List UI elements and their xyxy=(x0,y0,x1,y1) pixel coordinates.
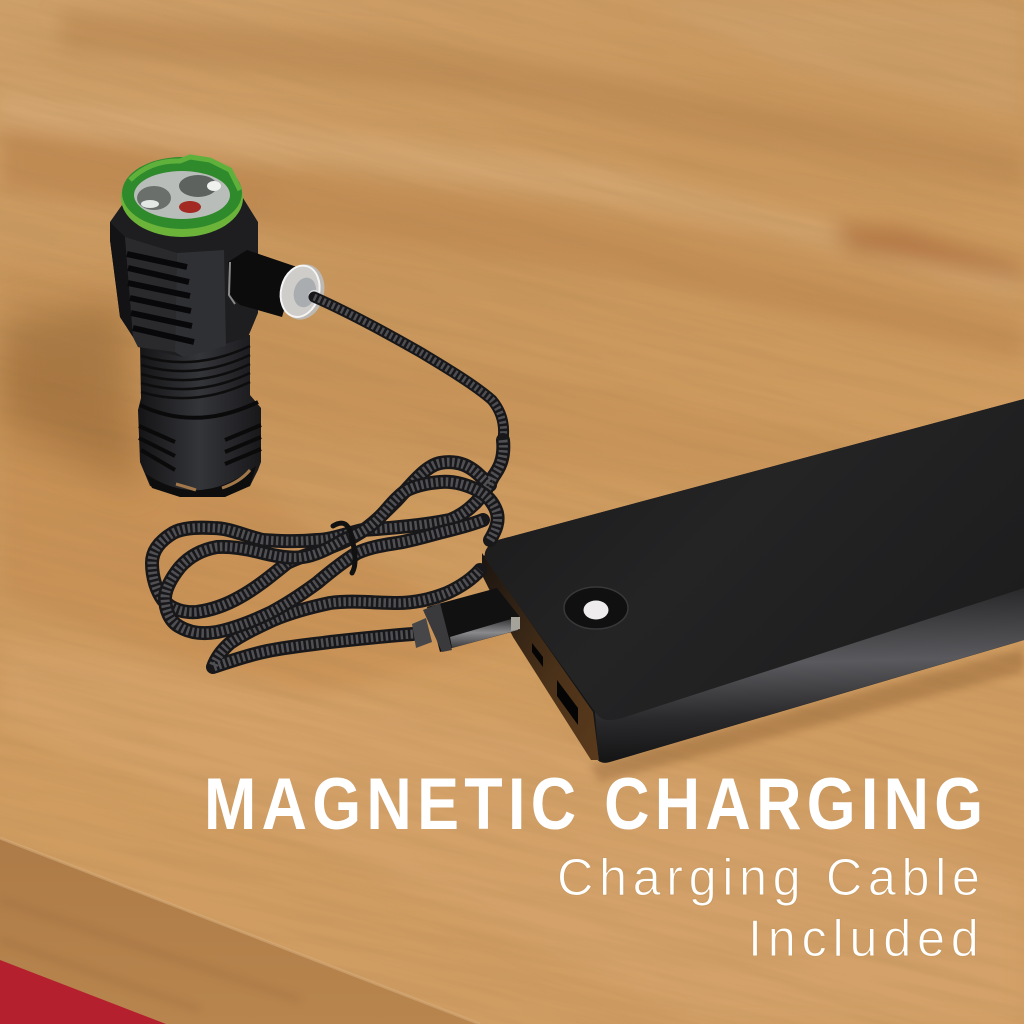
head fin facet xyxy=(125,237,177,352)
head centre facet xyxy=(175,250,226,357)
subtitle: Charging Cable xyxy=(557,848,980,906)
magnetic connector xyxy=(228,250,330,324)
power bank end face xyxy=(482,553,599,760)
power bank top surface xyxy=(485,399,1024,720)
power bank shadow xyxy=(590,648,1024,783)
USB plug xyxy=(412,588,520,652)
red surface in corner xyxy=(0,960,166,1024)
cable tie xyxy=(333,523,355,573)
power bank silhouette xyxy=(484,399,1024,763)
cable from flashlight xyxy=(314,297,504,440)
head left facet xyxy=(110,222,133,337)
shadow of flashlight xyxy=(0,300,140,490)
lens xyxy=(134,171,230,219)
flashlight head body xyxy=(110,198,258,357)
cable coil xyxy=(152,440,503,667)
power bank xyxy=(482,399,1024,782)
ports xyxy=(532,643,543,667)
power bank front bevel xyxy=(595,588,1024,762)
table front edge xyxy=(0,838,480,1024)
subtitle: Included xyxy=(748,909,979,967)
title: MAGNETIC CHARGING xyxy=(204,764,983,845)
flashlight tail section xyxy=(138,335,261,497)
subtitle xyxy=(557,848,980,967)
flashlight xyxy=(110,157,330,497)
green bezel ring xyxy=(121,159,243,237)
power button xyxy=(564,587,628,629)
cooling fins xyxy=(127,254,194,342)
braided charging cable xyxy=(152,297,504,667)
